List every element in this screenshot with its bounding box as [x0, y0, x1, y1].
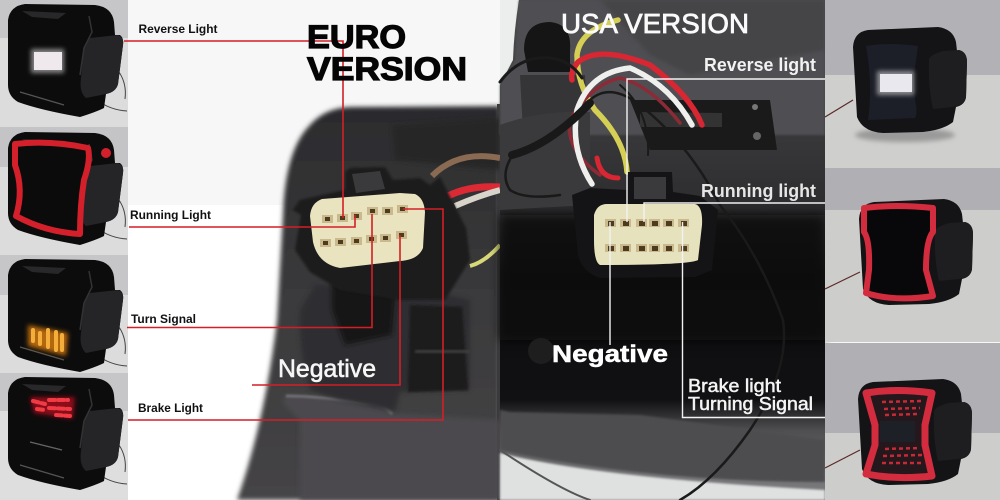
panel: left running lamp [0, 127, 128, 255]
label: negative usa: Negative [552, 341, 668, 368]
label: brake light and turning signal usa: Turning Signal [688, 394, 813, 414]
euro red lines [124, 41, 443, 420]
panel: left reverse lamp [0, 0, 128, 127]
panel: left turn lamp [0, 255, 128, 373]
panel: euro connector photo [237, 104, 503, 500]
label: negative euro: Negative [278, 355, 376, 383]
label: brake light and turning signal usa [688, 376, 813, 414]
heading: euro version: EURO [307, 19, 406, 55]
heading: euro version: VERSION [307, 51, 467, 87]
usa white lines [610, 79, 825, 418]
euro wires [432, 156, 500, 266]
heading: euro version [307, 19, 467, 87]
usa connector [572, 172, 718, 278]
label: reverse light euro: Reverse Light [138, 22, 218, 36]
label: brake light euro: Brake Light [138, 401, 203, 415]
panel: left brake lamp [0, 373, 128, 500]
heading: usa version: USA VERSION [561, 8, 749, 39]
label: brake light and turning signal usa: Brake light [688, 376, 781, 396]
label: running light euro: Running Light [130, 208, 211, 222]
label: reverse light usa: Reverse light [704, 55, 816, 75]
label: turn signal euro: Turn Signal [131, 312, 196, 326]
usa wires [500, 20, 784, 500]
panel: right running lamp [825, 168, 1000, 342]
label: running light usa: Running light [701, 181, 816, 201]
panel: usa connector photo [500, 0, 825, 500]
panel: right reverse lamp [825, 0, 1000, 168]
panel: right brake lamp [825, 343, 1000, 500]
euro connector [293, 167, 470, 300]
